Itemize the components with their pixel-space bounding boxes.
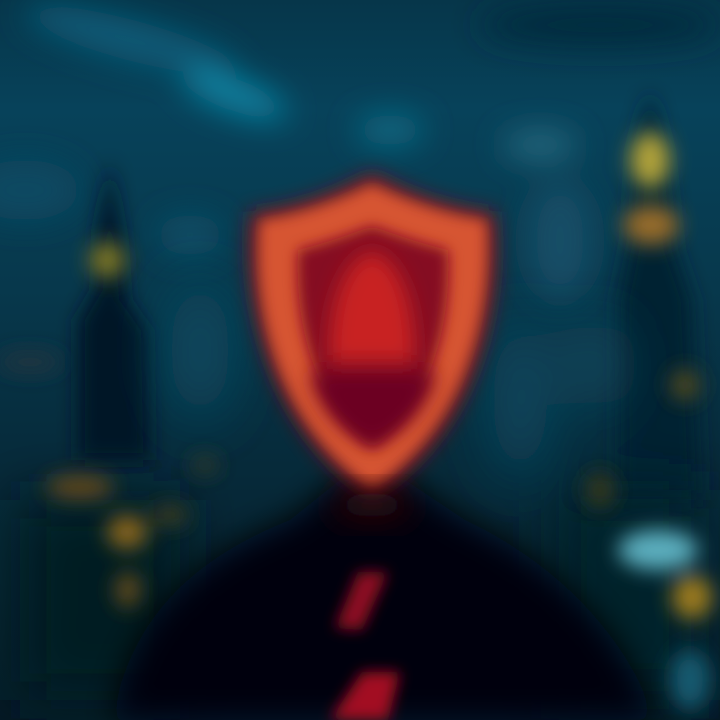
shield inner bbox=[298, 226, 448, 448]
sky clouds bbox=[0, 0, 720, 300]
right tower bbox=[618, 90, 700, 500]
shield glow bbox=[249, 172, 497, 498]
left tower bbox=[78, 160, 150, 460]
icon: shield head bbox=[249, 172, 497, 498]
neck shadow bbox=[332, 491, 412, 519]
icon: bright centre lock bbox=[330, 252, 414, 362]
shield lower shade bbox=[310, 372, 436, 446]
lower city shadows bbox=[20, 280, 700, 700]
figure: suit body bbox=[112, 480, 655, 720]
shield outer rim bbox=[258, 184, 487, 488]
tie stripes bbox=[330, 572, 400, 720]
city lights bbox=[0, 132, 712, 710]
